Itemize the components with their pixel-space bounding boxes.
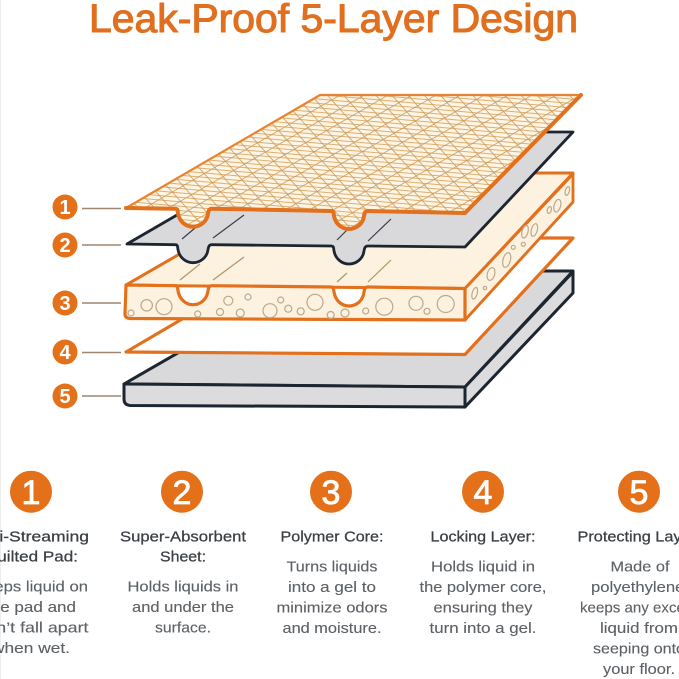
column 4: locking layer: the polymer core, [420,580,546,596]
column 2: super-absorbent sheet: Holds liquids in [128,580,238,596]
column 1: anti-streaming quilted pad [0,471,89,657]
diagram callout 4 [52,340,121,364]
diagram callout 4: 4 [59,342,71,364]
column 5: protecting layer: 5 [630,474,648,512]
column 2: super-absorbent sheet [120,471,246,636]
column 4: locking layer: turn into a gel. [430,621,536,637]
column 3: polymer core: and moisture. [282,621,382,637]
column 5: protecting layer: liquid from [600,621,678,637]
column 3: polymer core: Turns liquids [286,560,378,576]
column 5: protecting layer: your floor. [603,662,675,678]
column 4: locking layer [420,471,546,637]
column 2: super-absorbent sheet: Sheet: [160,550,206,566]
column 4: locking layer: ensuring they [434,600,533,616]
column 5: protecting layer: Made of [610,560,671,576]
diagram callout 3: 3 [59,293,71,315]
column 5: protecting layer: polyethylene, [591,580,679,596]
exploded layer diagram [122,92,584,409]
diagram callout 3 [52,290,121,316]
column 4: locking layer: 4 [474,474,492,512]
diagram callout 2 [52,232,121,258]
column 4: locking layer: Holds liquid in [431,560,535,576]
column 2: super-absorbent sheet: Super-Absorbent [120,530,246,546]
column 5: protecting layer: seeping onto [593,642,679,658]
column 3: polymer core: 3 [322,474,340,512]
column 3: polymer core: Polymer Core: [280,530,384,546]
column 2: super-absorbent sheet: and under the [132,600,234,616]
column 3: polymer core: into a gel to [288,580,376,596]
column 3: polymer core: minimize odors [276,600,388,616]
column 2: super-absorbent sheet: surface. [155,620,211,636]
column 5: protecting layer [578,471,679,678]
layer 1: anti-streaming quilted pad [124,92,584,231]
diagram callout 5 [52,384,121,408]
layer 3: polymer core [125,173,573,320]
layer 4: locking layer [126,238,573,354]
diagram callout 1: 1 [59,197,71,219]
diagram callout 1 [52,194,121,220]
layer 5: protecting layer [124,271,573,407]
diagram callout 5: 5 [59,386,71,408]
column 1: anti-streaming quilted pad: 1 [22,474,40,512]
column 4: locking layer: Locking Layer: [430,530,536,546]
diagram callout 2: 2 [59,235,71,257]
column 2: super-absorbent sheet: 2 [173,474,191,512]
layer 2: super-absorbent sheet [127,132,573,264]
column 3: polymer core [276,471,388,637]
